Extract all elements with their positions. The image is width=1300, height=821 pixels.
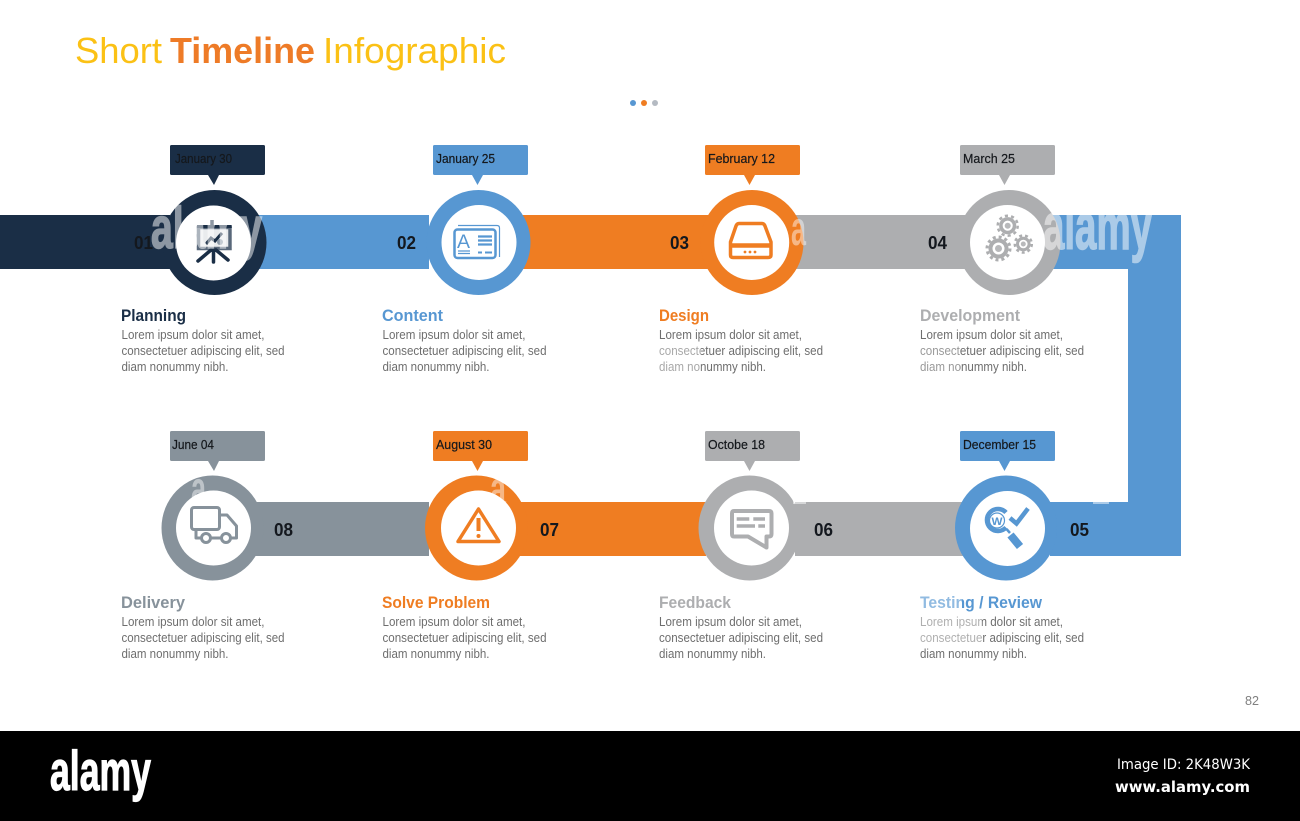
description: diam nonummy nibh. xyxy=(920,360,1027,374)
decorative three dots xyxy=(630,100,658,106)
date callout: December 15 xyxy=(960,431,1055,471)
description: diam nonummy nibh. xyxy=(382,647,490,661)
step number 06: 06 xyxy=(814,520,833,540)
date callout: February 12: February 12 xyxy=(708,152,775,166)
step 07: Solve Problem xyxy=(382,431,559,661)
date callout: January 25 xyxy=(433,145,528,185)
description xyxy=(122,615,285,661)
ring xyxy=(162,190,266,295)
step 05: Testing / Review xyxy=(920,431,1089,661)
description xyxy=(122,328,285,374)
band: step 06 grey xyxy=(795,502,965,556)
step number 02: 02 xyxy=(397,233,416,253)
date callout: June 04: June 04 xyxy=(172,438,214,452)
heading: Content xyxy=(382,306,443,325)
description: consectetuer adipiscing elit, sed xyxy=(122,631,285,645)
icon: magnifier with check xyxy=(987,508,1028,546)
description: Lorem ipsum dolor sit amet, xyxy=(659,615,802,629)
date callout: March 25 xyxy=(960,145,1055,185)
date callout: August 30: August 30 xyxy=(436,438,492,452)
description xyxy=(920,615,1084,661)
step 01: Planning xyxy=(121,145,285,374)
date callout: January 30: January 30 xyxy=(175,152,232,166)
step 08: Delivery xyxy=(121,431,293,661)
date callout: March 25: March 25 xyxy=(963,152,1015,166)
description: Lorem ipsum dolor sit amet, xyxy=(122,328,264,342)
step 04: Development xyxy=(920,145,1084,374)
date callout: February 12 xyxy=(705,145,800,185)
description: diam nonummy nibh. xyxy=(659,360,766,374)
step number 04: 04 xyxy=(928,233,947,253)
step number 03: 03 xyxy=(670,233,689,253)
band: step 08 slate xyxy=(255,502,429,556)
step 02: Content xyxy=(382,145,547,374)
description: diam nonummy nibh. xyxy=(122,360,228,374)
image id: Image ID: 2K48W3K xyxy=(1117,757,1251,773)
description: consectetuer adipiscing elit, sed xyxy=(382,344,547,358)
icon: presentation easel xyxy=(197,220,232,262)
description: consectetuer adipiscing elit, sed xyxy=(920,631,1084,645)
icon: gears xyxy=(987,216,1032,260)
description: Lorem ipsum dolor sit amet, xyxy=(382,615,526,629)
heading: Design xyxy=(659,306,709,325)
step number 07: 07 xyxy=(540,520,559,540)
stock watermarks: alamy xyxy=(151,196,262,261)
title: Short xyxy=(75,30,162,71)
ring xyxy=(426,190,530,295)
stock watermarks: a xyxy=(191,463,206,516)
band: step 03 orange xyxy=(522,215,712,269)
step number 01: 01 xyxy=(134,233,153,253)
heading: Feedback xyxy=(659,593,731,612)
description: Lorem ipsum dolor sit amet, xyxy=(659,328,802,342)
ring xyxy=(958,190,1060,295)
step 06: Feedback xyxy=(659,431,833,661)
date callout: Octobe 18: Octobe 18 xyxy=(708,438,765,452)
stock watermarks: a xyxy=(490,463,506,516)
stock watermarks: a xyxy=(791,203,806,256)
description: consectetuer adipiscing elit, sed xyxy=(659,631,823,645)
description: consectetuer adipiscing elit, sed xyxy=(122,344,285,358)
icon: chat bubble xyxy=(732,511,772,548)
icon: delivery truck xyxy=(192,508,236,542)
band: step 07 orange xyxy=(520,502,706,556)
stock watermarks: alamy xyxy=(1043,189,1152,263)
ring xyxy=(955,476,1057,580)
heading: Planning xyxy=(121,306,186,325)
description: Lorem ipsum dolor sit amet, xyxy=(920,328,1063,342)
ring xyxy=(162,476,264,580)
heading: Development xyxy=(920,306,1020,325)
band: step 04 grey xyxy=(795,215,967,269)
step number 08: 08 xyxy=(274,520,293,540)
description: diam nonummy nibh. xyxy=(382,360,490,374)
heading: Delivery xyxy=(121,593,186,612)
date callout: Octobe 18 xyxy=(705,431,800,471)
description: consectetuer adipiscing elit, sed xyxy=(659,344,823,358)
website: www.alamy.com xyxy=(1115,778,1250,796)
ring xyxy=(425,476,528,580)
stock watermarks xyxy=(151,189,1152,645)
description: consectetuer adipiscing elit, sed xyxy=(382,631,547,645)
heading: Solve Problem xyxy=(382,593,490,612)
description: Lorem ipsum dolor sit amet, xyxy=(382,328,526,342)
icon: storage drive xyxy=(730,224,771,258)
icon: warning triangle xyxy=(458,509,499,542)
description: diam nonummy nibh. xyxy=(920,647,1027,661)
title: Infographic xyxy=(323,30,506,71)
description xyxy=(659,615,823,661)
description xyxy=(382,328,547,374)
date callout: June 04 xyxy=(170,431,265,471)
description: diam nonummy nibh. xyxy=(122,647,228,661)
heading: Testing / Review xyxy=(920,593,1043,612)
band: step 02 blue xyxy=(258,215,429,269)
step number 05: 05 xyxy=(1070,520,1089,540)
footer logo: alamy xyxy=(50,739,151,802)
band: blue connector from step 04 down to step 05 xyxy=(1050,215,1181,556)
description xyxy=(382,615,547,661)
description xyxy=(920,328,1084,374)
icon: magnifier with check: W xyxy=(992,516,1003,528)
title xyxy=(75,30,506,71)
date callout: December 15: December 15 xyxy=(963,438,1036,452)
ring xyxy=(698,476,800,580)
description: diam nonummy nibh. xyxy=(659,647,766,661)
icon: article card: A xyxy=(457,232,470,253)
date callout: August 30 xyxy=(433,431,528,471)
date callout: January 25: January 25 xyxy=(436,152,495,166)
date callout: January 30 xyxy=(170,145,265,185)
footer bar xyxy=(0,731,1300,821)
step 03: Design xyxy=(659,145,823,374)
description xyxy=(659,328,823,374)
band: step 01 navy xyxy=(0,215,170,269)
ring xyxy=(700,190,804,295)
description: consectetuer adipiscing elit, sed xyxy=(920,344,1084,358)
description: Lorem ipsum dolor sit amet, xyxy=(920,615,1063,629)
description: Lorem ipsum dolor sit amet, xyxy=(122,615,264,629)
icon: article card xyxy=(454,226,500,258)
page number: 82 xyxy=(1245,694,1259,708)
title: Timeline xyxy=(170,30,315,71)
